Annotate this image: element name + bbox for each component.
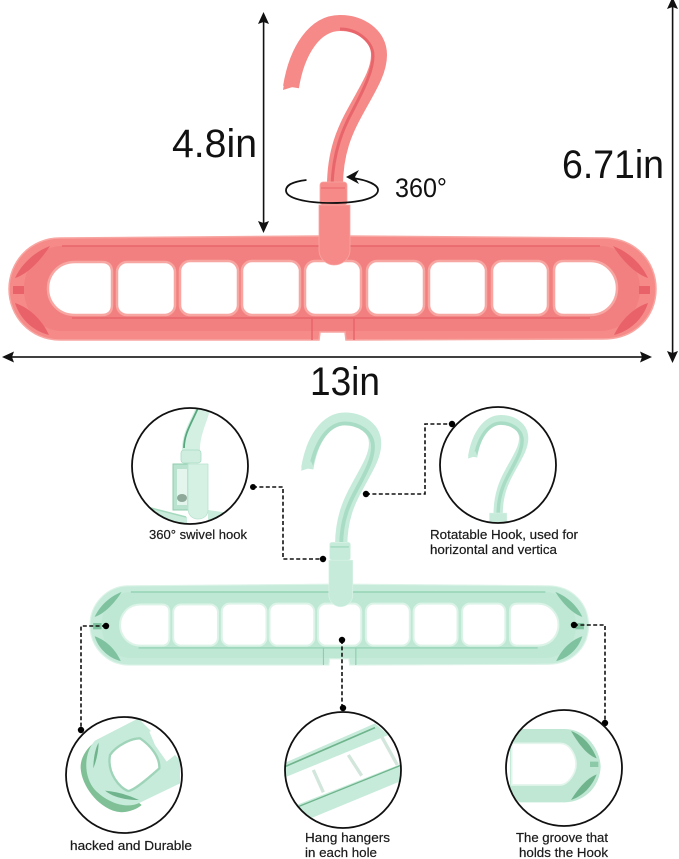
hanger body (9, 236, 656, 340)
end grooves (13, 246, 650, 335)
rotation arrow (286, 170, 378, 203)
connector: each hole (339, 637, 346, 711)
tray (102, 592, 576, 658)
label: each hole: Hang hangers (305, 830, 391, 845)
dimension label: 6.71in: 6.71in (562, 143, 664, 187)
hook (301, 419, 375, 545)
panel: groove detail (500, 710, 622, 826)
connector: groove (571, 622, 608, 726)
label: rotatable hook: Rotatable Hook, used for (430, 527, 579, 542)
hanger body (90, 584, 589, 665)
panel: rotatable hook detail (440, 407, 556, 536)
pink hanger (9, 23, 656, 340)
dimension label: 4.8in: 4.8in (172, 122, 257, 166)
panel: swivel hook detail (132, 405, 250, 530)
panel: stacked and durable detail (66, 717, 182, 833)
end grooves (93, 592, 584, 661)
dimension arrow: 4.8in (258, 12, 269, 233)
swivel collar and stem (329, 542, 353, 607)
nine hanging holes (120, 604, 558, 646)
label: durable: hacked and Durable (70, 838, 192, 853)
rotation label: 360° (395, 173, 447, 203)
connector: rotatable hook (363, 421, 455, 497)
panel: each hole detail (280, 712, 403, 828)
dimension label: 13in: 13in (310, 360, 380, 404)
label: rotatable hook: horizontal and vertica (430, 542, 558, 557)
nine hanging holes (48, 261, 617, 315)
green hanger (90, 419, 589, 665)
dimension arrow: 13in (2, 352, 652, 362)
hook (283, 23, 379, 186)
swivel collar and stem (319, 182, 350, 265)
label: swivel hook: 360° swivel hook (149, 527, 247, 542)
dimension arrow: 6.71in (667, 0, 678, 363)
label: groove: The groove that (516, 830, 608, 845)
tray (24, 246, 640, 331)
connector: stacked and durable (78, 623, 109, 733)
connector: swivel hook (250, 484, 326, 562)
